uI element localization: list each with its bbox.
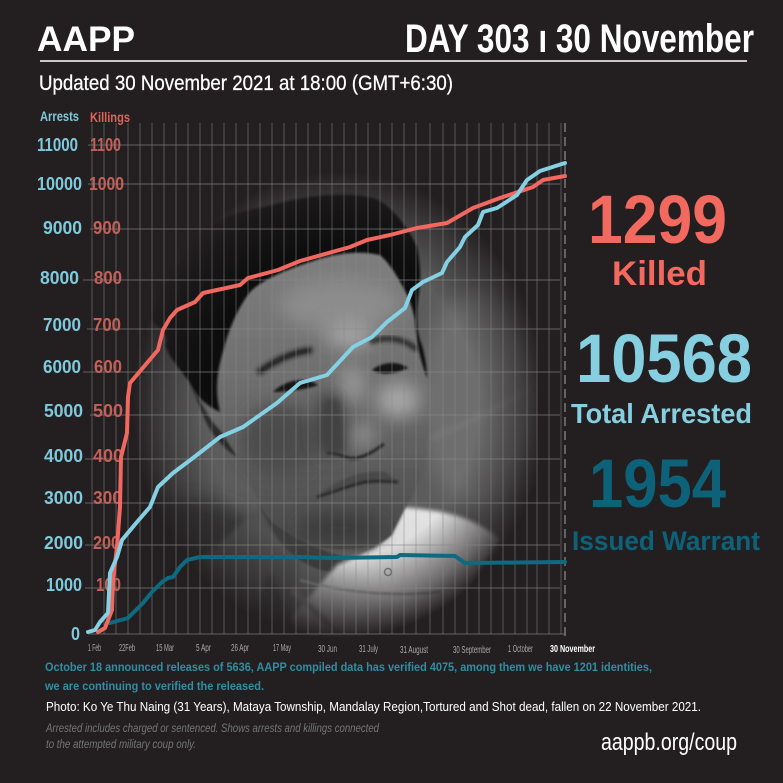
x axis dates: 30 November: [550, 644, 595, 655]
x axis dates: 30 September: [453, 645, 491, 656]
y axis: killings: 700: [93, 315, 121, 335]
face: [200, 251, 429, 549]
header: [37, 17, 754, 95]
stat: total arrested: Total Arrested: [571, 398, 752, 429]
source url: aappb.org/coup: [601, 729, 737, 756]
axis series labels: Killings: [90, 109, 130, 125]
footnote: to the attempted military coup only.: [46, 737, 196, 751]
footnote: [45, 721, 379, 751]
y axis: killings: 400: [93, 446, 123, 466]
y axis: arrests: 7000: [43, 315, 81, 335]
y axis: arrests: 3000: [44, 488, 83, 508]
photo caption: Photo: Ko Ye Thu Naing (31 Years), Mataya Township, Mandalay Region,Tortured and Shot dead, fallen on 22 November 2021.: [46, 700, 701, 714]
grid: [83, 123, 565, 634]
y axis: killings: 800: [94, 268, 122, 288]
stat: total arrested: 10568: [576, 320, 752, 397]
note: released detainees: [44, 660, 652, 693]
x axis dates: 26 Apr: [231, 643, 249, 654]
x axis dates: 1 Feb: [88, 643, 101, 654]
y axis: arrests: 6000: [43, 357, 81, 377]
y axis: killings: 1100: [90, 135, 121, 155]
y axis: killings: 100: [96, 575, 121, 595]
y axis: killings: 300: [93, 488, 122, 508]
highlights: [280, 279, 400, 331]
nose: [327, 444, 384, 458]
axis series labels: Arrests: [40, 108, 79, 124]
y axis: arrests: 10000: [37, 174, 82, 194]
y axis: killings: 900: [93, 218, 121, 238]
y axis: arrests: 8000: [40, 268, 79, 288]
axis series labels: [40, 108, 130, 125]
stat: killed: [588, 181, 727, 293]
shoulder crease: [432, 385, 535, 438]
eyes: [273, 380, 318, 392]
y axis: arrests: 4000: [44, 446, 83, 466]
stat: killed: 1299: [588, 181, 727, 258]
x axis dates: 31 July: [359, 644, 378, 655]
line: arrests: [88, 163, 565, 632]
hair: [149, 195, 427, 412]
y axis: killings: 200: [93, 533, 120, 553]
stat: issued warrant: Issued Warrant: [572, 526, 760, 556]
line: killings: [98, 176, 565, 632]
stat: issued warrant: [572, 445, 760, 556]
y axis: arrests: 2000: [44, 533, 83, 553]
y axis: arrests: [37, 135, 83, 644]
x axis dates: 15 Mar: [156, 643, 174, 654]
mouth: [323, 472, 394, 494]
y axis: arrests: 5000: [44, 401, 83, 421]
stat: killed: Killed: [612, 255, 707, 293]
footnote: Arrested includes charged or sentenced. Shows arrests and killings connected: [45, 721, 379, 735]
x axis dates: 5 Apr: [196, 643, 211, 654]
shirt: [294, 504, 499, 630]
note: released detainees: we are continuing to verified the released.: [44, 679, 264, 693]
y axis: arrests: 11000: [37, 135, 78, 155]
logo: AAPP: AAPP: [37, 20, 135, 59]
y axis: arrests: 9000: [43, 218, 82, 238]
stat: total arrested: [571, 320, 752, 429]
y axis: killings: 1000: [89, 174, 124, 194]
line: issued warrants: [110, 555, 565, 623]
x axis dates: 22Feb: [119, 643, 135, 654]
y axis: arrests: 1000: [46, 575, 82, 595]
note: released detainees: October 18 announced releases of 5636, AAPP compiled data has verified 4075, among them we have 1201 identities,: [45, 660, 652, 674]
x axis dates: 30 Jun: [318, 644, 337, 655]
y axis: killings: 500: [93, 401, 123, 421]
y axis: killings: [89, 135, 124, 595]
x axis dates: [88, 643, 595, 656]
x axis dates: 17 May: [273, 643, 291, 654]
y axis: killings: 600: [94, 357, 122, 377]
update timestamp: Updated 30 November 2021 at 18:00 (GMT+6:30): [39, 72, 453, 95]
neck and chest: [212, 511, 298, 590]
portrait photo: [141, 181, 536, 634]
x axis dates: 1 October: [508, 644, 533, 655]
y axis: arrests: 0: [71, 624, 80, 644]
eyebrows: [258, 350, 312, 373]
x axis dates: 31 August: [400, 645, 428, 656]
stat: issued warrant: 1954: [589, 445, 726, 522]
